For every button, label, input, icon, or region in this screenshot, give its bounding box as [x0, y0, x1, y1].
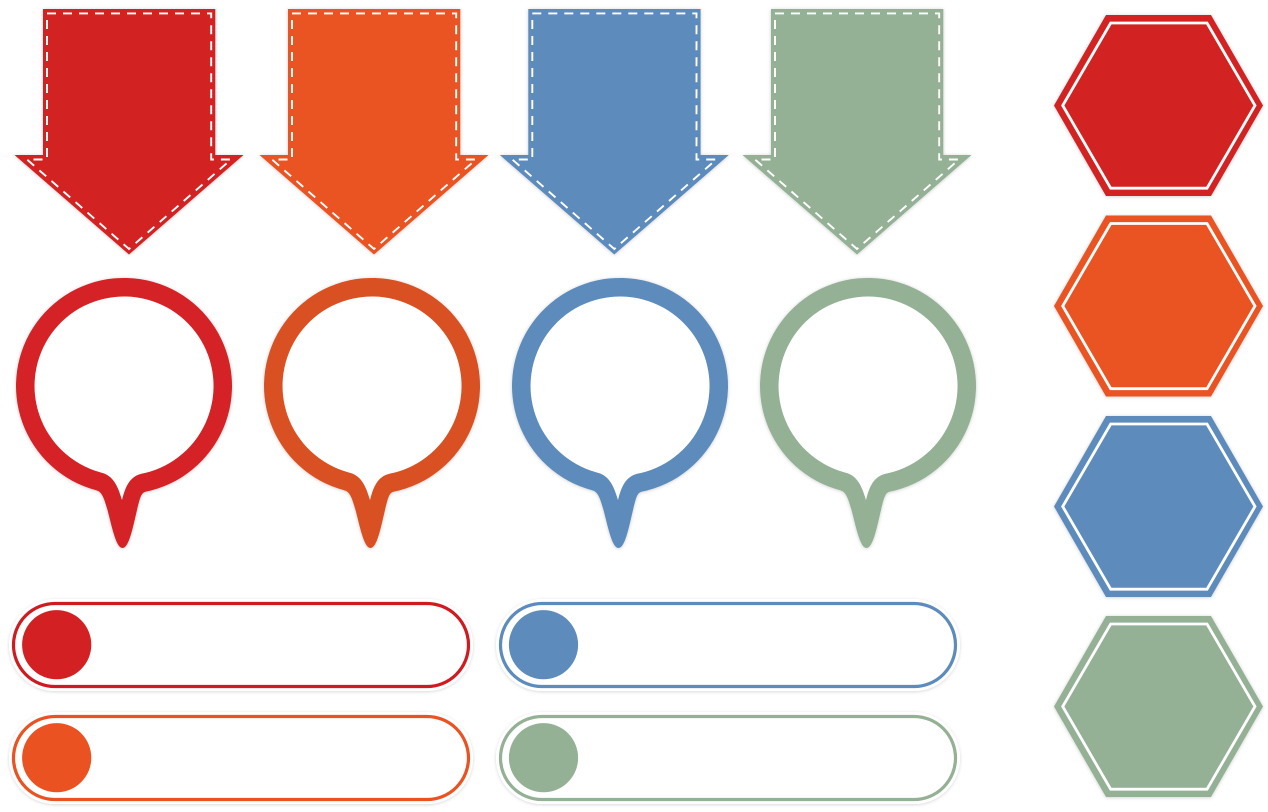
arrow: green [742, 9, 972, 254]
hexagon: red [1054, 15, 1263, 196]
arrow: blue [500, 9, 729, 254]
speech bubble: orange [264, 278, 480, 548]
hexagon: orange [1054, 216, 1263, 396]
speech bubble: green [760, 278, 976, 548]
pill: blue [496, 599, 960, 691]
hexagon: blue [1054, 416, 1263, 597]
pill: orange [9, 712, 473, 804]
hexagon: green [1054, 616, 1263, 797]
pill: red [9, 599, 473, 691]
speech bubble: red [16, 278, 232, 548]
speech bubble: blue [512, 278, 728, 548]
arrow: red [14, 9, 244, 254]
arrow: orange [260, 9, 488, 254]
pill: green [496, 712, 960, 804]
